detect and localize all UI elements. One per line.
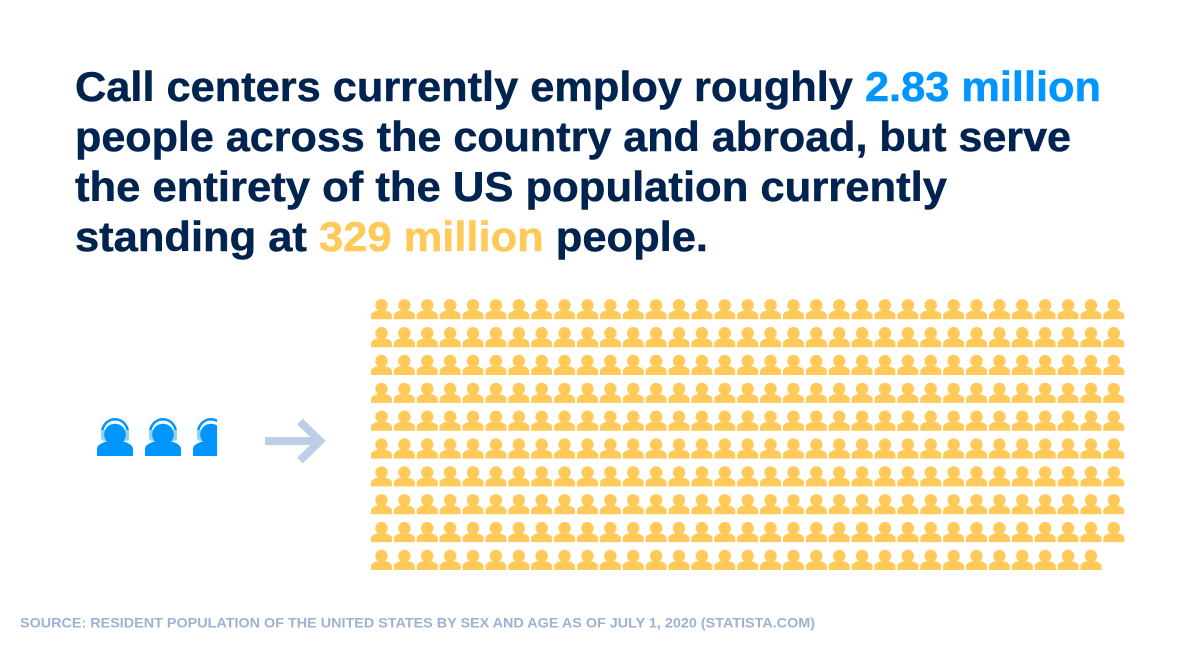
headline	[75, 63, 1101, 260]
headline: people across the country and abroad, but serve	[75, 113, 1071, 160]
source note: SOURCE: RESIDENT POPULATION OF THE UNITED STATES BY SEX AND AGE AS OF JULY 1, 2020 (STATISTA.COM)	[20, 616, 815, 630]
arrow	[265, 422, 320, 460]
headline: the entirety of the US population currently	[75, 163, 948, 210]
headline: Call centers currently employ roughly 2.83 million	[75, 63, 1101, 110]
icon grid: US population	[371, 299, 1124, 570]
headline: standing at 329 million people.	[75, 213, 708, 260]
icon group: call center agents	[97, 418, 229, 456]
